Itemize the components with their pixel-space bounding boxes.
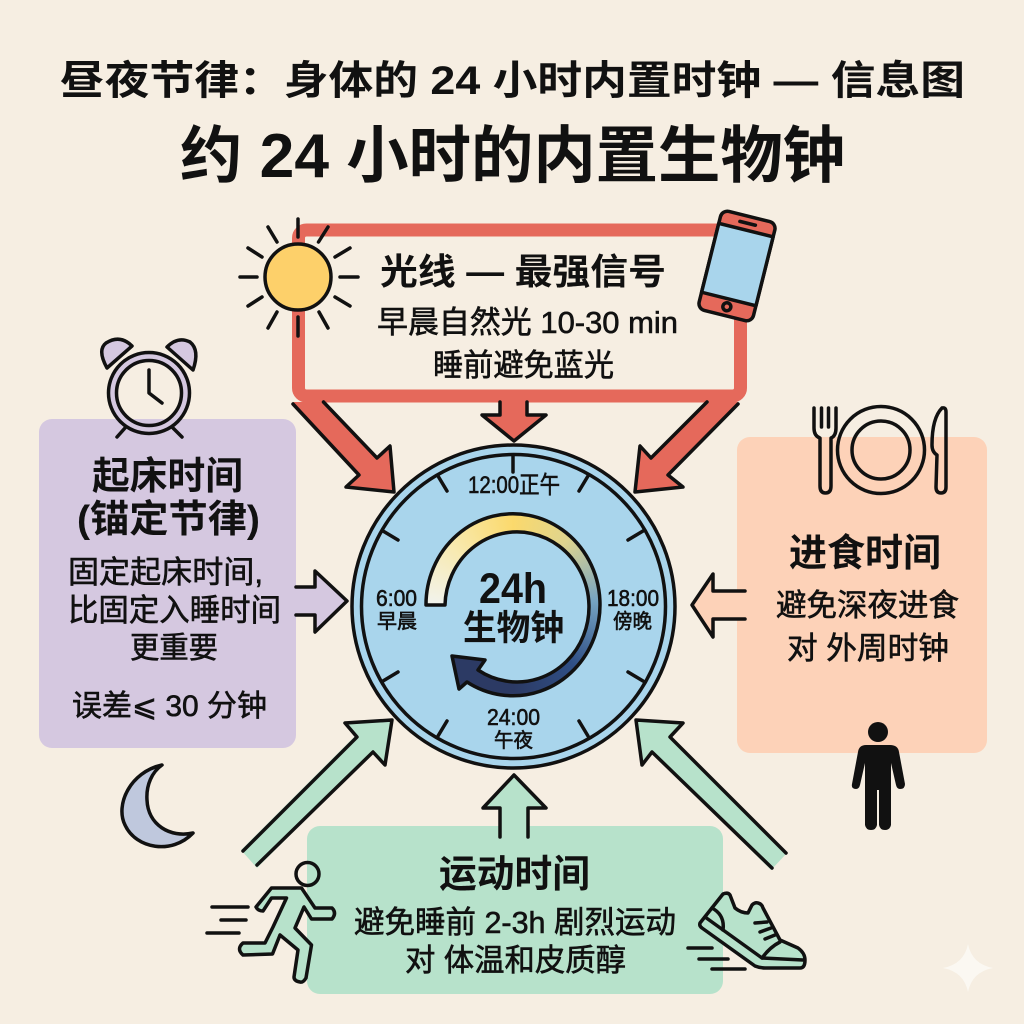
clock label: morning: 早晨 (377, 611, 417, 633)
heading: anchor rhythm: (锚定节律) (77, 499, 260, 541)
clock label: morning: 6:00 (376, 585, 417, 611)
arrow: wake time (295, 570, 347, 632)
clock label: midnight: 24:00 (487, 704, 540, 730)
subtitle: 约 24 小时的内置生物钟 (180, 122, 845, 191)
panel: wake time (39, 419, 296, 748)
icon: phone (697, 210, 777, 322)
panel: exercise time (307, 826, 723, 994)
text: wake line 2: 比固定入睡时间 (68, 593, 281, 628)
heading: light: 光线 — 最强信号 (380, 251, 666, 292)
text: meal line 1: 避免深夜进食 (776, 588, 959, 623)
icon: plate (838, 406, 924, 494)
text: wake line 1: 固定起床时间, (68, 555, 263, 590)
icon: moon (122, 765, 193, 847)
clock label: morning (376, 585, 417, 633)
text: light line 1: 早晨自然光 10-30 min (377, 305, 678, 340)
clock arc arrow (424, 512, 602, 698)
title: 昼夜节律：身体的 24 小时内置时钟 — 信息图 (60, 59, 965, 103)
clock (352, 445, 675, 768)
icon: sparkle (943, 944, 993, 992)
text: meal line 2: 对 外周时钟 (787, 631, 949, 666)
clock label: noon: 12:00正午 (468, 472, 560, 499)
arrow: exercise center (483, 775, 546, 840)
clock label: evening: 傍晚 (613, 610, 652, 633)
arrow: light center (482, 402, 546, 441)
arrow: meal time (692, 573, 745, 637)
icon: alarm clock (102, 339, 196, 437)
icon: knife (932, 408, 946, 493)
arrow: light left (293, 402, 394, 492)
wake time text (68, 456, 281, 723)
icon: person (852, 722, 905, 830)
meal time text (776, 533, 959, 666)
text: exercise line 2: 对 体温和皮质醇 (405, 943, 626, 978)
text: light line 2: 睡前避免蓝光 (433, 348, 614, 383)
icon: sun (240, 219, 358, 336)
clock label: evening: 18:00 (607, 585, 659, 611)
clock label: evening (607, 585, 659, 633)
clock center: 24h: 24h (479, 565, 547, 613)
heading: wake time: 起床时间 (92, 456, 243, 498)
heading: meal time: 进食时间 (789, 533, 941, 575)
clock label: midnight: 午夜 (494, 729, 533, 752)
panel: light (298, 230, 740, 396)
arrow: exercise left (241, 719, 393, 868)
heading: exercise time: 运动时间 (439, 854, 590, 896)
icon: shoe (688, 893, 805, 969)
panel: meal time (737, 437, 987, 753)
text: exercise line 1: 避免睡前 2-3h 剧烈运动 (354, 905, 676, 940)
arrow: exercise right (635, 719, 787, 870)
exercise text (354, 854, 676, 978)
clock label: midnight (487, 704, 540, 752)
text: wake line 3: 更重要 (130, 632, 218, 665)
clock center: biological clock: 生物钟 (463, 609, 564, 648)
arrow: light right (635, 402, 738, 492)
icon: runner (207, 862, 334, 982)
text: tolerance: 误差⩽ 30 分钟 (72, 690, 267, 723)
icon: fork (814, 408, 836, 493)
